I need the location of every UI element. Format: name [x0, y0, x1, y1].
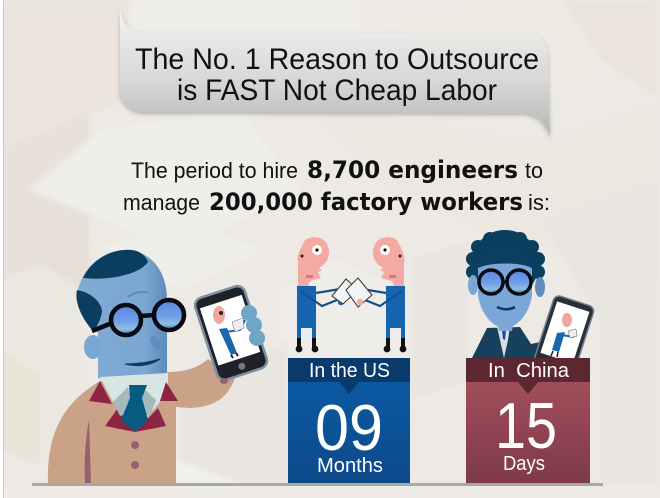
subtitle text: The period to hire	[131, 158, 298, 183]
subtitle text: 8,700 engineers	[307, 156, 518, 184]
fingers	[241, 305, 257, 321]
panel: In China	[466, 358, 590, 483]
head	[78, 250, 167, 382]
face	[478, 264, 532, 328]
left man with phone	[48, 250, 269, 483]
panel: In China: 15	[495, 389, 557, 462]
title text	[135, 43, 539, 107]
hair	[83, 250, 148, 279]
subtitle text: manage	[123, 190, 200, 215]
panel: In the US: Months	[317, 455, 383, 477]
jacket	[48, 359, 235, 483]
two pink figures exchanging tablets	[296, 237, 406, 352]
subtitle text: 200,000 factory workers	[209, 188, 523, 216]
phone figure	[213, 306, 245, 358]
phone figure	[551, 313, 577, 357]
subtitle text: is:	[528, 190, 550, 215]
suit	[472, 327, 545, 358]
tablets	[332, 279, 358, 304]
glasses	[504, 280, 506, 284]
phone	[533, 294, 595, 376]
left figure	[296, 237, 346, 352]
panel: In China: Days	[503, 453, 545, 475]
shirt and tie	[100, 373, 168, 432]
title text: The No. 1 Reason to Outsource	[135, 43, 539, 76]
glasses	[92, 315, 155, 331]
title banner	[120, 8, 550, 137]
phone	[193, 284, 269, 382]
panel: In the US: In the US	[309, 360, 390, 382]
subtitle text	[123, 156, 550, 216]
hand	[570, 340, 584, 358]
title text: is FAST Not Cheap Labor	[177, 74, 497, 107]
floor line	[32, 483, 603, 486]
right figure	[356, 237, 406, 352]
panel: In China: In China	[488, 360, 570, 382]
ears	[468, 275, 478, 295]
hair	[466, 230, 545, 298]
panel: In the US	[288, 358, 410, 483]
face details	[125, 359, 160, 366]
panel: In the US: 09	[315, 391, 383, 464]
China man	[466, 230, 595, 376]
subtitle text: to	[525, 158, 543, 183]
